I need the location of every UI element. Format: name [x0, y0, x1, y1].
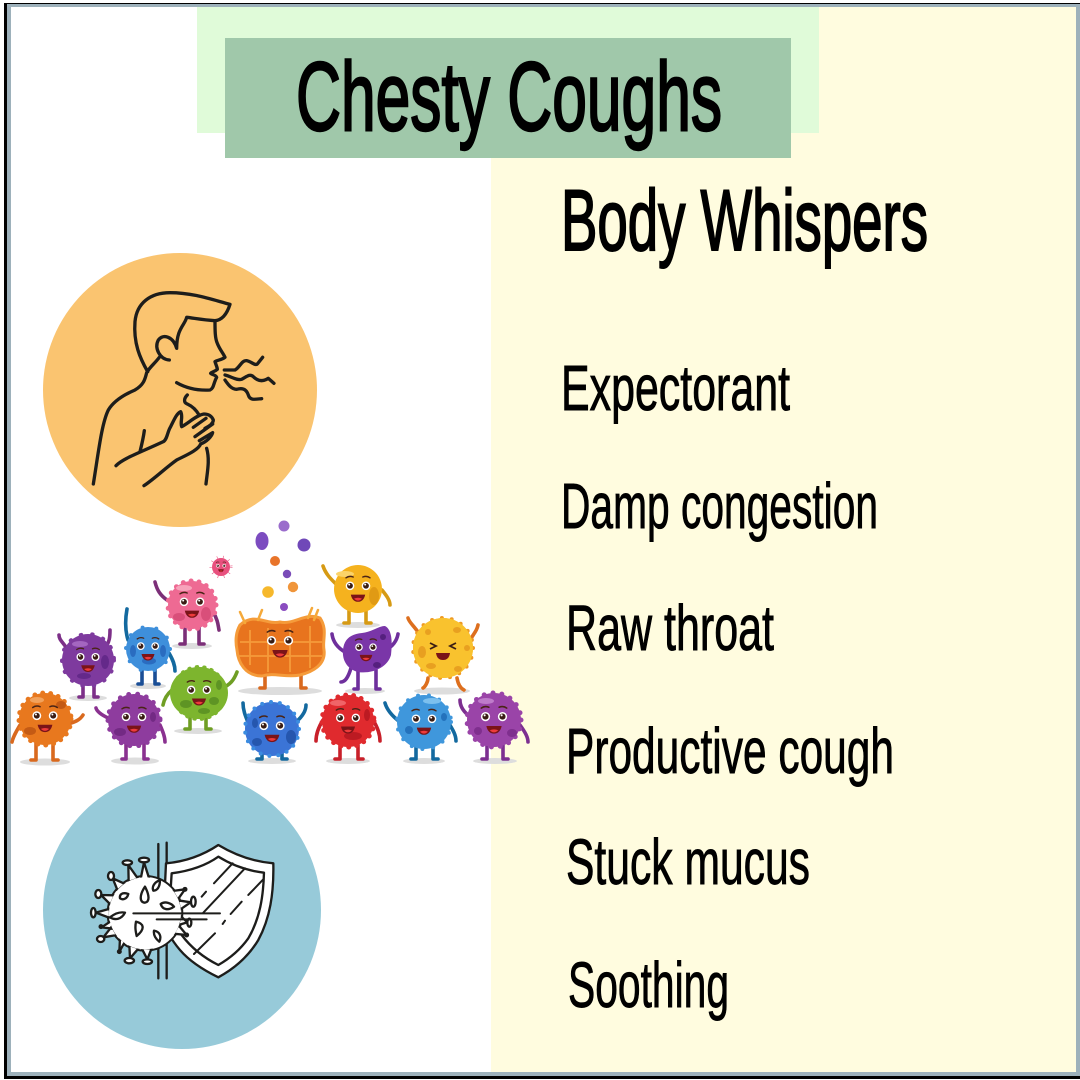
keyword: damp congestion: Damp congestion [561, 470, 878, 542]
title: Chesty Coughs [296, 42, 722, 151]
keyword: expectorant: Expectorant [561, 352, 790, 424]
title banner [197, 7, 819, 158]
germ: blue bottom [243, 702, 306, 764]
germ: light blue [385, 695, 456, 764]
germ: yellow bumpy [408, 618, 478, 694]
icon: virus against shield in blue circle [43, 771, 321, 1049]
shield [163, 845, 273, 977]
keyword list [561, 352, 894, 1021]
germ: green [163, 667, 237, 734]
germ: blue waving [126, 609, 175, 689]
floating particles [256, 520, 310, 611]
germ: yellow round [323, 565, 390, 628]
germ: small pink [212, 558, 230, 576]
impact lines [133, 913, 220, 919]
vertical barrier lines [158, 843, 167, 978]
germ: purple right [460, 693, 528, 764]
keyword: productive cough: Productive cough [566, 715, 894, 787]
keyword: raw throat: Raw throat [566, 592, 774, 664]
germ: purple bottom [96, 694, 165, 764]
virus [91, 858, 196, 964]
keyword: stuck mucus: Stuck mucus [566, 826, 810, 898]
icon: person coughing in orange circle [43, 253, 317, 527]
germ: orange [12, 693, 83, 766]
germ: purple blob [332, 626, 398, 694]
keyword: soothing: Soothing [568, 949, 729, 1021]
illustration: group of germ characters [12, 520, 528, 766]
germ: red [316, 695, 380, 764]
germ: orange intestine [236, 608, 324, 695]
germ: pink [155, 581, 219, 649]
germ: spiky purple [59, 630, 114, 701]
